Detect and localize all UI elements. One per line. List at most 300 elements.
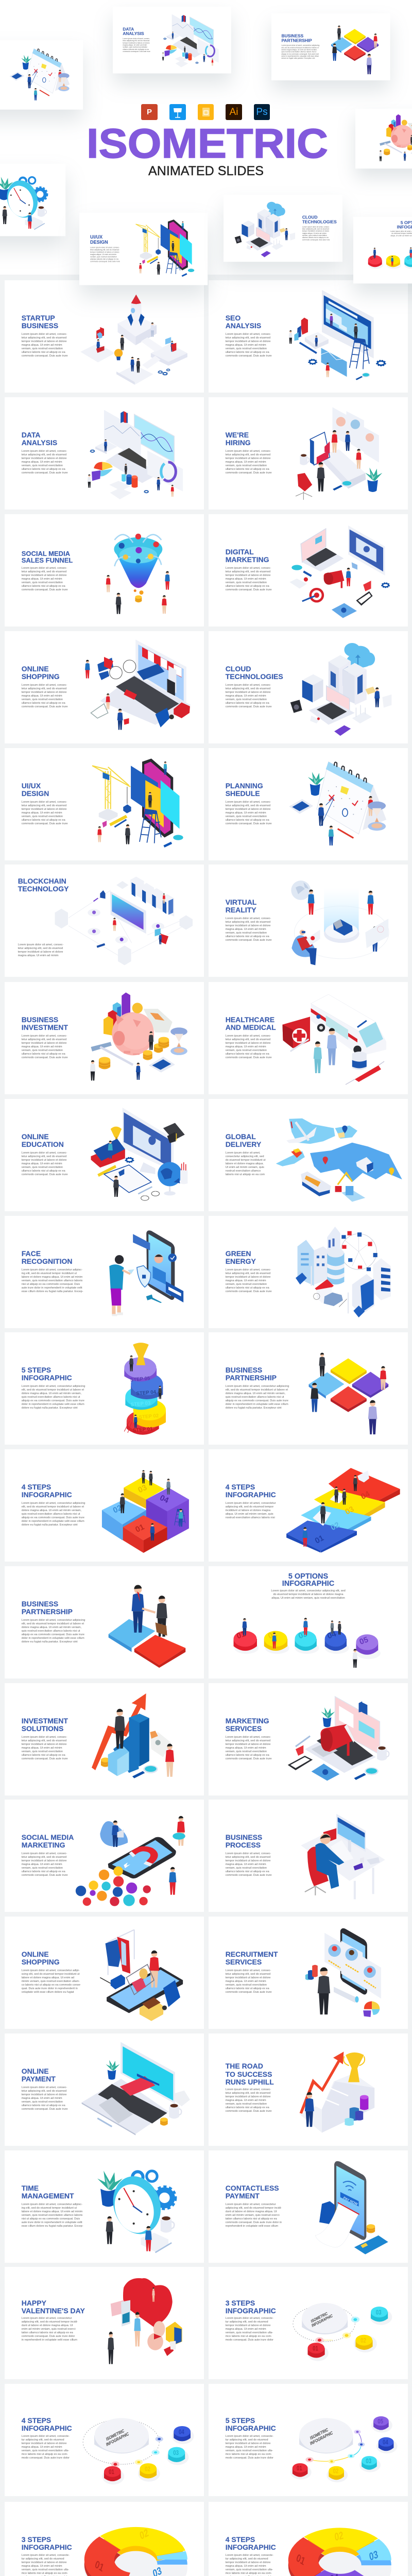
illustration: central disc with 3 nodes (209, 2267, 408, 2379)
body text (226, 1735, 272, 1761)
illustration: option discs: 02 (267, 1630, 278, 1641)
heading: GREEN (226, 1249, 251, 1258)
body text: ullamco laboris nisi ut aliquip ex ea (22, 702, 65, 705)
heading: INVESTMENT (22, 1023, 68, 1031)
illustration: central disc with 5 nodes: 02 (333, 2467, 338, 2475)
body text: Lorem ipsum dolor sit amet, consec- (22, 2086, 67, 2089)
card body text: Lorem ipsum dolor sit amet, consectetur adipiscing (281, 44, 319, 46)
heading: SERVICES (226, 1958, 262, 1966)
heading (209, 1572, 408, 1587)
body text: tur adipiscing elit, sed do eiusmod (226, 2320, 268, 2324)
heading: ONLINE (22, 2067, 49, 2075)
heading: 5 OPTIONS (288, 1572, 328, 1581)
body text: ullamco laboris nisi ut aliquip ex ea (22, 1170, 65, 1173)
body text: veniam, quis nostrud exercitation ulla- (226, 2331, 273, 2334)
body text: tempor incididunt ut labore et dolore (22, 1158, 66, 1161)
heading (226, 314, 261, 330)
body text: tempor incididunt ut labore et dolore (22, 340, 66, 343)
body text: commodo consequat. Duis aute irure (22, 354, 68, 358)
body text: adipiscing elit, sed do eiusmod tempor incidi- (226, 2206, 282, 2209)
card body text: dolore magna aliqua. Ut enim ad minim veniam, (281, 49, 317, 50)
illustration: stacked discs: STEP 02 (139, 1413, 159, 1420)
card body text: tetur adipiscing elit, sed do eiusmod (90, 248, 119, 250)
illustration: step platforms: 03 (344, 1505, 355, 1517)
heading: RUNS UPHILL (226, 2078, 274, 2086)
body text: tempor incididunt ut labore et dolore (226, 924, 270, 927)
body text: laboris nisi ut aliquip ex ea com (226, 1173, 265, 1176)
heading (22, 1600, 73, 1616)
body text (22, 683, 68, 708)
hero card: time management (0, 164, 65, 236)
card illustration: piggy bank (355, 109, 412, 168)
body text: commodo consequat. Duis aute irure (22, 1757, 68, 1760)
illustration: laptop megaphone (209, 1683, 408, 1795)
body text (22, 1852, 68, 1877)
body text: veniam, quis nostrud exercitation (226, 464, 267, 467)
body text: modo consequat. Duis aute irure dolor (22, 2456, 70, 2460)
heading: PROCESS (226, 1841, 261, 1849)
heading: RECRUITMENT (226, 1950, 278, 1958)
heading (22, 2416, 72, 2432)
body text: magna aliqua. Ut enim ad minim (226, 811, 266, 814)
title (0, 118, 412, 180)
heading (226, 1133, 261, 1149)
body text: dolore magna aliqua. Ut enim ad minim veniam, (22, 1626, 81, 1629)
body text: ullamco laboris nisi ut aliquip ex ea (22, 2104, 65, 2107)
icon: google slides (198, 104, 214, 120)
illustration: shopping on phone (5, 1917, 204, 2029)
body text: dolor in reprehenderit in voluptate velit esse cillum (226, 1402, 288, 1405)
heading: EDUCATION (22, 1140, 64, 1148)
body text: tempor incididunt ut labore et dolore (226, 574, 270, 577)
illustration: option discs: 03 (297, 1630, 308, 1641)
body text: veniam, quis nostrud exercitation (226, 1866, 267, 1869)
body text: tetur adipiscing elit, sed do eiusmod (226, 804, 270, 807)
body text: commodo consequat. Duis aute irure (226, 1757, 272, 1760)
body text: veniam, quis nostrud exercitation (226, 1049, 267, 1052)
heading: UI/UX (22, 782, 41, 790)
heading: 5 STEPS (22, 1366, 51, 1374)
body text: in reprehenderit in voluptate velit esse cillum (22, 2338, 77, 2342)
body text: magna aliqua. Ut enim ad minim (22, 1045, 62, 1048)
illustration: man at desk (209, 1800, 408, 1911)
card heading (123, 27, 144, 36)
body text: Lorem ipsum dolor sit amet, consec- (226, 333, 271, 336)
heading: 3 STEPS (226, 2299, 255, 2307)
heading: PAYMENT (226, 2192, 260, 2200)
body text: tempor incididunt ut labore et dolore (22, 2093, 66, 2096)
illustration: central disc with 5 nodes: 05 (377, 2418, 384, 2425)
body text: dunt ut labore et dolore magna aliqua. Ut (226, 2210, 277, 2213)
heading: THE ROAD (226, 2062, 263, 2070)
heading (226, 2299, 276, 2315)
heading: BUSINESS (22, 1015, 58, 1024)
heading: 4 STEPS (22, 1483, 51, 1491)
body text: tation ullamco laboris nisi ut aliquip ex ea (226, 2217, 277, 2221)
illustration: option discs: 01 (235, 1630, 247, 1641)
body text: ullamco laboris nisi ut aliquip ex ea (226, 1052, 269, 1055)
hero card: 5 options infographic (353, 217, 412, 283)
body text: modo consequat. Duis aute irure dolor (226, 2338, 273, 2342)
body text (22, 2435, 70, 2460)
body text: Lorem ipsum dolor sit amet, consectetur (22, 2317, 72, 2320)
body text: Lorem ipsum dolor sit amet, consec- (226, 1268, 271, 1272)
body text: tetur adipiscing elit, sed do eiusmod (226, 687, 270, 690)
illustration: central disc with 3 nodes: ISOMETRIC (311, 2311, 329, 2324)
body text (22, 1501, 85, 1527)
body text: tempor incididunt ut labore et dolore (22, 574, 66, 577)
body text: Lorem ipsum dolor sit amet, consecte- (22, 2553, 70, 2556)
illustration: central disc with 4 nodes: ISOMETRIC (106, 2428, 125, 2442)
illustration: central disc with 5 nodes: 03 (366, 2458, 372, 2465)
body text: quis nostrud exercitation ullamco laboris nisi ut (22, 1513, 80, 1516)
body text: tempor incididunt ut labore et dolore (226, 2442, 270, 2445)
panel: face recognition (5, 1216, 204, 1328)
icon: powerpoint (141, 104, 158, 120)
heading: BUSINESS (22, 1600, 58, 1608)
heading: ONLINE (22, 665, 49, 673)
body text: commodo consequat. Duis aute irure (226, 1290, 272, 1293)
card body text (281, 44, 319, 60)
body text (22, 1969, 81, 1994)
body text: tempor incididunt ut labore et dolore (22, 2442, 66, 2445)
heading: 3 STEPS (22, 2535, 51, 2543)
body text: commodo consequat. Duis aute irure (22, 1056, 68, 1059)
body text: magna aliqua. Ut enim ad minim (226, 2446, 266, 2449)
heading (226, 1366, 277, 1382)
body text: Lorem ipsum dolor sit amet, consec- (226, 449, 271, 452)
body text: dolor in reprehenderit in voluptate velit esse cillum (22, 1520, 84, 1523)
heading: INVESTMENT (22, 1717, 68, 1725)
panel: healthcare and medical (209, 982, 408, 1094)
body text: mco laboris nisi ut aliquip ex ea com- (22, 2572, 68, 2575)
panel: 4 steps staircase (209, 1449, 408, 1561)
heading: DATA (22, 431, 40, 439)
body text: veniam, quis nostrud exercitation (22, 1049, 63, 1052)
card body text: magna aliqua. Ut enim ad minim (123, 44, 147, 46)
body text: tempor incididunt ut labore et dolore (226, 340, 270, 343)
card body text: aliquip ex ea commodo consequat. Duis aute irure (281, 53, 319, 55)
heading: SHOPPING (22, 1958, 60, 1966)
heading: WE'RE (226, 431, 249, 439)
body text: enim ad minim veniam, quis nostrud exerci- (226, 2213, 280, 2216)
illustration: stacked discs: STEP 03 (130, 1400, 151, 1408)
body text: adipiscing elit, sed do eiusmod tempor (226, 1505, 273, 1509)
body text (226, 1969, 272, 1994)
body text: tetur adipiscing elit, sed do eiusmod (226, 1856, 270, 1859)
card body text: Lorem ipsum dolor sit amet, consec- (123, 38, 150, 39)
heading (226, 1951, 278, 1967)
body text (22, 2086, 68, 2111)
heading (22, 2067, 56, 2083)
illustration: green city (209, 1216, 408, 1328)
body text (226, 449, 272, 474)
body text: tetur adipiscing elit, sed do eiusmod (226, 1972, 270, 1975)
heading (22, 2536, 72, 2551)
body text: veniam, quis nostrud exercitation (22, 581, 63, 584)
illustration: payment phone (209, 2150, 408, 2263)
illustration: world delivery map (209, 1099, 408, 1211)
body text: veniam, quis nostrud exercitation (22, 2100, 63, 2103)
body text (226, 2435, 273, 2460)
body text: ullamco laboris nisi ut aliquip ex ea (226, 1286, 269, 1289)
heading: VALENTINE'S DAY (22, 2307, 85, 2315)
body text: Lorem ipsum dolor sit amet, consec- (226, 1735, 271, 1738)
illustration: growth arrow and bars (5, 1683, 204, 1795)
heading (22, 782, 49, 798)
body text: tetur adipiscing elit, sed do eiusmod (226, 453, 270, 456)
body text: quis nostrud exercitation ullamco laboris nisi ut (22, 1629, 80, 1632)
illustration: central disc with 5 nodes (209, 2384, 408, 2496)
body text: commodo consequat. Duis aute irure (22, 822, 68, 825)
illustration: central disc with 4 nodes: 02 (145, 2465, 150, 2473)
body text: veniam, quis nostrud exercitation (226, 347, 267, 350)
illustration: app construction (92, 758, 183, 848)
chart: 4 segment donut: 01 (295, 2551, 306, 2568)
body text (226, 917, 272, 942)
card body text: elit, sed do eiusmod tempor incididunt ut labore et (281, 47, 319, 48)
heading (22, 1951, 60, 1967)
heading (226, 2536, 276, 2551)
body text: Ut enim ad minim veniam, quis (226, 1165, 264, 1168)
card heading: DESIGN (90, 239, 108, 245)
body text: mco laboris nisi ut aliquip ex ea com- (226, 2453, 272, 2456)
heading (226, 2184, 279, 2200)
body text (22, 449, 68, 474)
heading: INFOGRAPHIC (282, 1580, 334, 1588)
body text: Lorem ipsum dolor sit amet, consec- (226, 1852, 271, 1855)
body text: Lorem ipsum dolor sit amet, consectetur adipiscing elit, sed (271, 1589, 346, 1592)
body text: commodo consequat. Duis aute irure (226, 1991, 272, 1994)
panel: digital marketing (209, 514, 408, 626)
body text: ullamco laboris nisi ut aliquip ex ea (226, 818, 269, 821)
heading: INFOGRAPHIC (22, 2424, 72, 2432)
body text: Lorem ipsum dolor sit amet, consecte- (226, 2317, 273, 2320)
illustration: rocket and platforms (80, 295, 187, 385)
body text: tempor incididunt ut labore et dolore (226, 808, 270, 811)
heading: SOLUTIONS (22, 1724, 63, 1733)
heading: ONLINE (22, 1950, 49, 1958)
body text: tempor incididunt ut labore et dolore (22, 1042, 66, 1045)
body text (22, 1735, 68, 1761)
body text: labore et dolore magna aliqua. (226, 1162, 264, 1165)
body text (226, 801, 272, 825)
panel: 5 steps discs (209, 2384, 408, 2496)
heading: SALES FUNNEL (22, 556, 73, 564)
heading: HAPPY (22, 2299, 46, 2307)
body text: commodo consequat. Duis aute irure (22, 588, 68, 591)
body text: Lorem ipsum dolor sit amet, consectetur (226, 1501, 276, 1504)
body text: veniam, quis nostrud exercitation ulla- (22, 2568, 69, 2571)
illustration: stacked discs: STEP 04 (136, 1389, 157, 1397)
illustration: puzzle team (209, 1332, 408, 1445)
panel: data analysis (5, 397, 204, 509)
body text: magna aliqua. Ut enim ad minim (226, 1863, 266, 1866)
body text: ullamco laboris nisi ut aliquip ex ea (226, 702, 269, 705)
icon: illustrator (226, 104, 242, 120)
heading: 4 STEPS (226, 1483, 255, 1491)
heading: 4 STEPS (226, 2535, 255, 2543)
heading: HEALTHCARE (226, 1015, 274, 1024)
body text (226, 567, 272, 591)
body text: tempor incididunt ut labore et dolore (18, 950, 63, 953)
body text: tetur adipiscing elit, sed do eiusmod (226, 920, 270, 923)
body text: tetur adipiscing elit, sed do eiusmod (226, 1038, 270, 1041)
body text (22, 2203, 83, 2228)
heading: INFOGRAPHIC (22, 1374, 72, 1382)
heading: MANAGEMENT (22, 2192, 74, 2200)
body text: Lorem ipsum dolor sit amet, consec- (22, 333, 67, 336)
heading: SHEDULE (226, 789, 260, 798)
card heading: DATA (123, 26, 134, 31)
heading: STARTUP (22, 314, 55, 322)
panel: cloud technologies (209, 631, 408, 743)
body text: magna aliqua. Ut enim ad minim (226, 1279, 266, 1282)
body text: quis nostrud exercitation ullamco laboris nisi ut (226, 1395, 284, 1398)
card body text: Lorem ipsum dolor sit amet, consec- (302, 226, 330, 228)
body text: aliqua. Ut enim ad minim veniam, quis nostrud exercitation (271, 1596, 345, 1599)
heading (226, 2416, 276, 2432)
chart: 4 segment donut: 03 (368, 2548, 379, 2563)
body text: tempor incididunt ut labore et dolore (22, 456, 66, 460)
heading: DELIVERY (226, 1140, 261, 1148)
body text: commodo consequat. Duis aute irure (226, 471, 272, 474)
heading: AND MEDICAL (226, 1023, 276, 1031)
illustration: stacked discs: STEP 05 (130, 1376, 150, 1383)
heading: MARKETING (226, 555, 269, 564)
body text: quis nostrud exercitation ullamco laboris nisi ut (22, 1395, 80, 1398)
body text: Lorem ipsum dolor sit amet, consectetur adipiscing (226, 1385, 289, 1388)
card body text: tetur adipiscing elit, sed do eiusmod (302, 228, 329, 230)
card body text: commodo consequat. Duis aute irure (90, 260, 120, 262)
body text: tetur adipiscing elit, sed do eiusmod (226, 1272, 270, 1275)
card body text: magna aliqua. Ut enim ad minim (302, 232, 327, 234)
body text: tetur adipiscing elit, sed do eiusmod (22, 570, 66, 573)
body text: elit, sed do eiusmod tempor incididunt ut labore et (22, 1388, 84, 1391)
body text: aliquip ex ea commodo consequat. Duis aute irure (22, 1633, 84, 1636)
panel: 3 steps discs (209, 2267, 408, 2379)
heading (226, 1483, 276, 1499)
icon: powerpoint: P (147, 108, 152, 116)
body text: Lorem ipsum dolor sit amet, consec- (22, 801, 67, 804)
card body text: veniam, quis nostrud exercitation (302, 234, 327, 236)
illustration: valentine couple and heart (5, 2267, 204, 2379)
heading (22, 665, 60, 681)
illustration: cloud servers (290, 643, 391, 736)
body text: Lorem ipsum dolor sit amet, consec- (226, 801, 271, 804)
body text: Lorem ipsum dolor sit amet, consec- (226, 683, 271, 686)
body text: veniam, quis nostrud exercitation ullamco laboris (22, 2213, 82, 2216)
body text: ullamco laboris nisi ut aliquip ex ea (226, 468, 269, 471)
card illustration: cloud servers (224, 195, 342, 261)
heading: SOCIAL MEDIA (22, 549, 70, 557)
card illustration: data dashboard (113, 6, 231, 73)
body text: magna aliqua. Ut enim ad minim (22, 577, 62, 580)
body text: tur adipiscing elit, sed do eiusmod (226, 2438, 268, 2442)
body text: tetur adipiscing elit, sed do eiusmod (22, 1155, 66, 1158)
panel: time management (5, 2150, 204, 2263)
heading: TECHNOLOGIES (226, 672, 283, 681)
illustration: sales funnel (106, 534, 170, 614)
illustration: central disc with 4 nodes: INFOGRAPHIC (106, 2431, 129, 2447)
illustration: phone magnet and social icons (5, 1800, 204, 1911)
card heading: UI/UX (90, 234, 102, 240)
heading (22, 1717, 68, 1733)
heading (226, 782, 263, 798)
illustration: stairs to trophy (209, 2033, 408, 2145)
body text: labore et dolore magna aliqua. Ut enim ad (22, 1976, 74, 1979)
body text: ing elit, sed do eiusmod tempor incididunt ut (22, 2206, 77, 2209)
card body text (123, 38, 150, 53)
heading: TECHNOLOGY (18, 885, 68, 893)
illustration: data dashboard (88, 410, 183, 499)
heading (226, 1834, 262, 1850)
body text: Lorem ipsum dolor sit amet, consec- (226, 917, 271, 920)
heading: 5 STEPS (226, 2416, 255, 2425)
panel: recruitment services (209, 1917, 408, 2029)
body text: magna aliqua. Ut enim ad minim (22, 2446, 62, 2449)
heading: SEO (226, 314, 241, 322)
body text: tempor incididunt ut labore et dolore (226, 1859, 270, 1862)
heading (18, 877, 69, 893)
card body text (302, 226, 330, 241)
illustration: ambulance (209, 982, 408, 1094)
body text: tempor incididunt ut labore et dolore (226, 690, 270, 693)
heading: INFOGRAPHIC (22, 2543, 72, 2551)
body text (22, 1619, 85, 1643)
body text: adipiscing elit, sed do eiusmod tempor incidi- (22, 2320, 78, 2324)
body text: ullamco laboris nisi ut aliquip ex ea (226, 1754, 269, 1757)
body text: veniam, quis nostrud exercitation ulla- (226, 2449, 273, 2452)
heading (22, 2299, 85, 2315)
hero card: planning schedule (0, 40, 83, 109)
body text: tetur adipiscing elit, sed do eiusmod (22, 2090, 66, 2093)
card body text: tempor incididunt ut labore et dolore (302, 230, 329, 232)
body text: tempor incididunt ut labore et dolore (226, 1976, 270, 1979)
body text: esse cillum dolore eu fugiat nulla pariatur. Excep- (22, 2225, 83, 2228)
heading: ANALYSIS (226, 321, 261, 330)
body text: commodo consequat. Duis aute irure (226, 822, 272, 825)
body text: dolor in reprehenderit in voluptate velit esse cillum (22, 1402, 84, 1405)
panel: 4 steps discs (5, 2384, 204, 2496)
body text: dolor in reprehenderit in voluptate velit esse cillum (22, 1636, 84, 1639)
body text: magna aliqua. Ut enim ad minim (226, 343, 266, 346)
panel: investment solutions (5, 1683, 204, 1795)
card heading: BUSINESS (281, 33, 303, 38)
illustration: central disc with 5 nodes: 01 (297, 2465, 302, 2472)
heading (226, 548, 269, 564)
body text: magna aliqua. Ut enim ad minim (226, 461, 266, 464)
heading: MARKETING (226, 1717, 269, 1725)
body text: Lorem ipsum dolor sit amet, consec- (226, 1035, 271, 1038)
illustration: central disc with 4 nodes (5, 2384, 204, 2496)
chart: 4 segment donut: 02 (334, 2529, 344, 2543)
body text: veniam, quis nostrud exercitation (226, 931, 267, 935)
panel: 3 steps donut (5, 2502, 204, 2576)
body text: Lorem ipsum dolor sit amet, consecte- (226, 2553, 273, 2556)
body text: commodo consequat. Duis aute irure (22, 705, 68, 708)
card body text: magna aliqua. Ut enim ad minim (90, 253, 116, 255)
body text: ullamco laboris nisi ut aliquip ex ea (226, 2106, 269, 2109)
body text: tempor incididunt ut labore et dolore (226, 2561, 270, 2564)
body text: tempor incididunt ut labore et dolore (226, 2324, 270, 2327)
heading (22, 1250, 72, 1266)
hero card: business investment (355, 109, 412, 168)
body text (226, 2203, 282, 2228)
body text: tur adipiscing elit, sed do eiusmod (22, 2557, 64, 2561)
illustration: option discs: 04 (326, 1630, 338, 1641)
body text: tur adipiscing elit, sed do eiusmod (226, 2557, 268, 2561)
